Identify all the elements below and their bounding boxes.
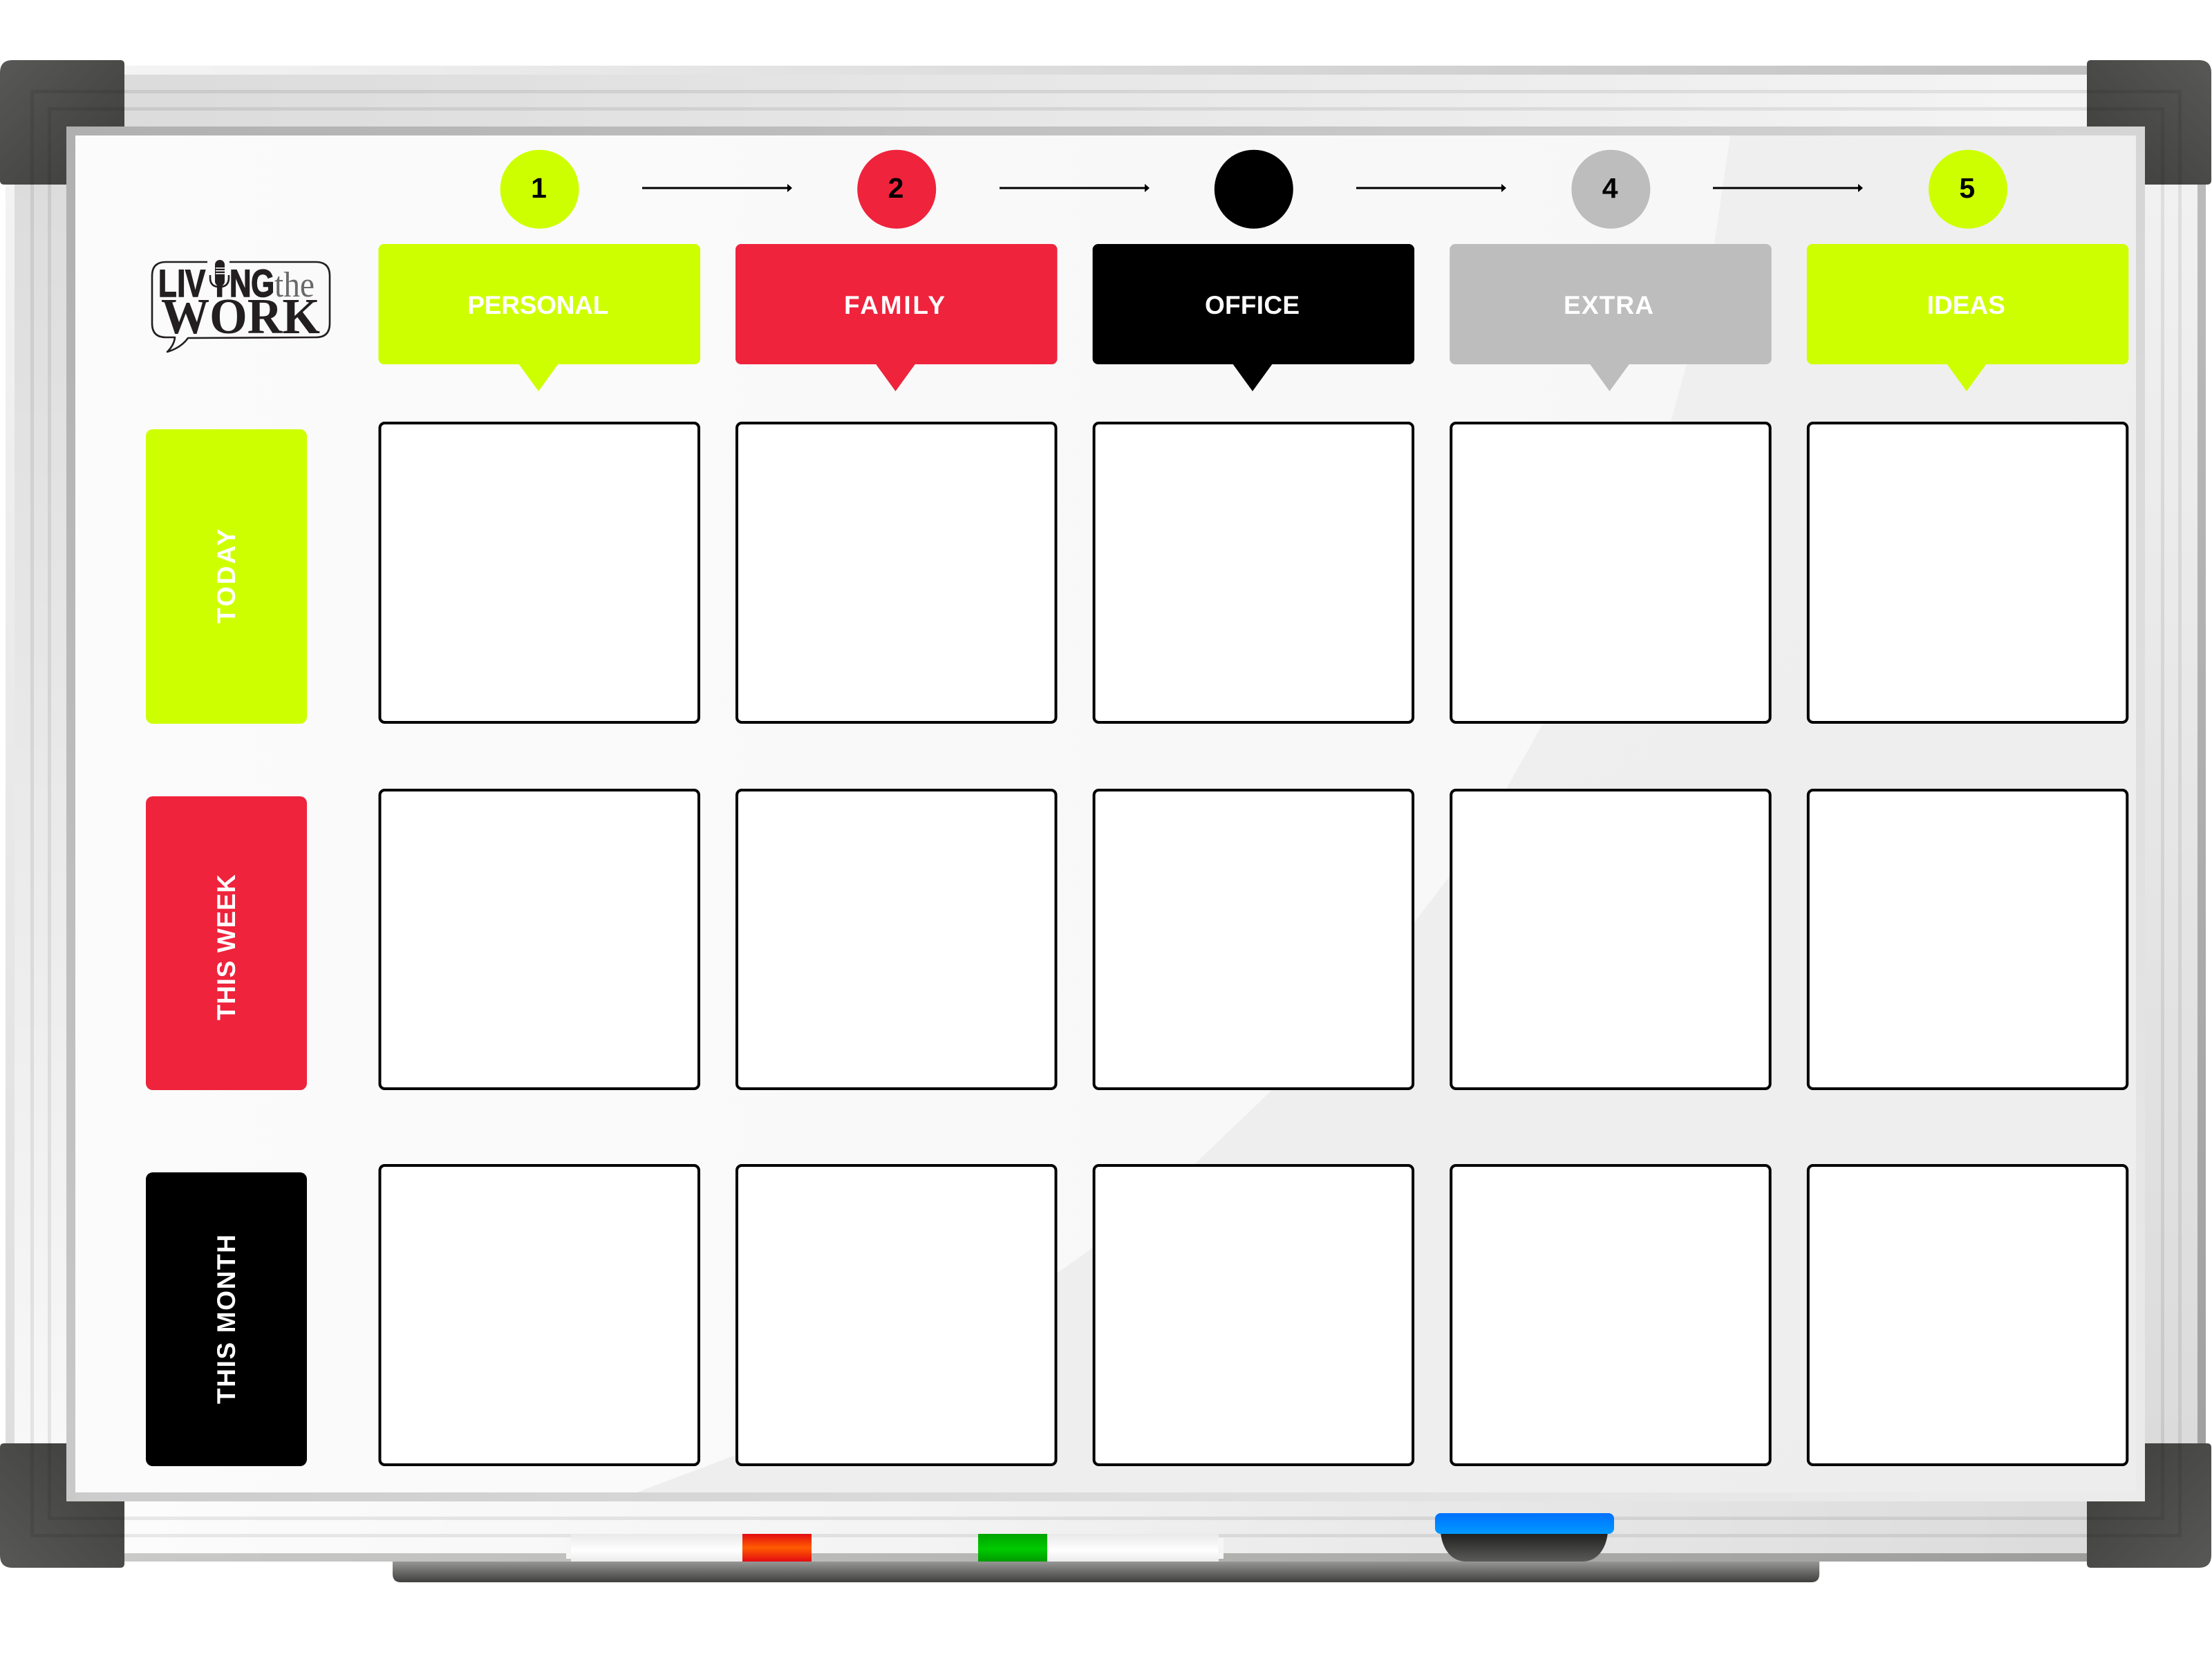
step circle 5 (1929, 150, 2007, 229)
row label: This Week: THIS WEEK (212, 874, 241, 1020)
header: Office: OFFICE (1205, 291, 1300, 319)
board: writing surface (66, 126, 2145, 1501)
step circle 2 (857, 150, 936, 229)
step circle 4: 4 (1602, 172, 1618, 204)
header: Extra: EXTRA (1564, 291, 1653, 319)
logo word WORK: WORK (161, 288, 320, 344)
corner: bottom left (0, 1443, 124, 1568)
step circle 1 (500, 150, 579, 229)
corner: top right (2087, 60, 2211, 185)
logo: Living the Work (152, 260, 330, 352)
logo word the: the (274, 265, 315, 305)
step circle 3: 3 (1245, 172, 1261, 204)
grid row: Today cells (380, 423, 2127, 722)
arrow 1 to 2 (642, 184, 792, 192)
logo word LIVING: LIVING (158, 262, 274, 305)
header: Family: FAMILY (844, 291, 945, 319)
eraser (1435, 1513, 1614, 1562)
row label: Today: TODAY (212, 529, 241, 624)
arrow 3 to 4 (1356, 184, 1506, 192)
header: Personal: PERSONAL (467, 291, 608, 319)
header: Family (735, 244, 1058, 391)
logo speech bubble (152, 262, 330, 352)
step circle 3 (1215, 150, 1293, 229)
marker: green (978, 1534, 1224, 1562)
step circle 2: 2 (888, 172, 903, 204)
arrow 2 to 3 (1000, 184, 1150, 192)
logo microphone (210, 260, 229, 297)
step circle 1: 1 (531, 172, 547, 204)
row label: This Month: THIS MONTH (212, 1235, 241, 1404)
row label: This Week (146, 796, 307, 1090)
marker: red (566, 1534, 812, 1562)
row label: This Month (146, 1172, 307, 1466)
header: Ideas (1807, 244, 2128, 391)
header: Personal (379, 244, 700, 391)
corner: top left (0, 60, 124, 185)
arrow 4 to 5 (1713, 184, 1863, 192)
grid row: This Week cells (380, 790, 2127, 1089)
header: Extra (1450, 244, 1772, 391)
tray: marker ledge (393, 1559, 1819, 1582)
header: Ideas: IDEAS (1927, 291, 2005, 319)
header: Office (1093, 244, 1414, 391)
step circle 5: 5 (1959, 172, 1975, 204)
step circle 4 (1571, 150, 1650, 229)
grid row: This Month cells (380, 1165, 2127, 1465)
corner: bottom right (2087, 1443, 2211, 1568)
row label: Today (146, 429, 307, 724)
